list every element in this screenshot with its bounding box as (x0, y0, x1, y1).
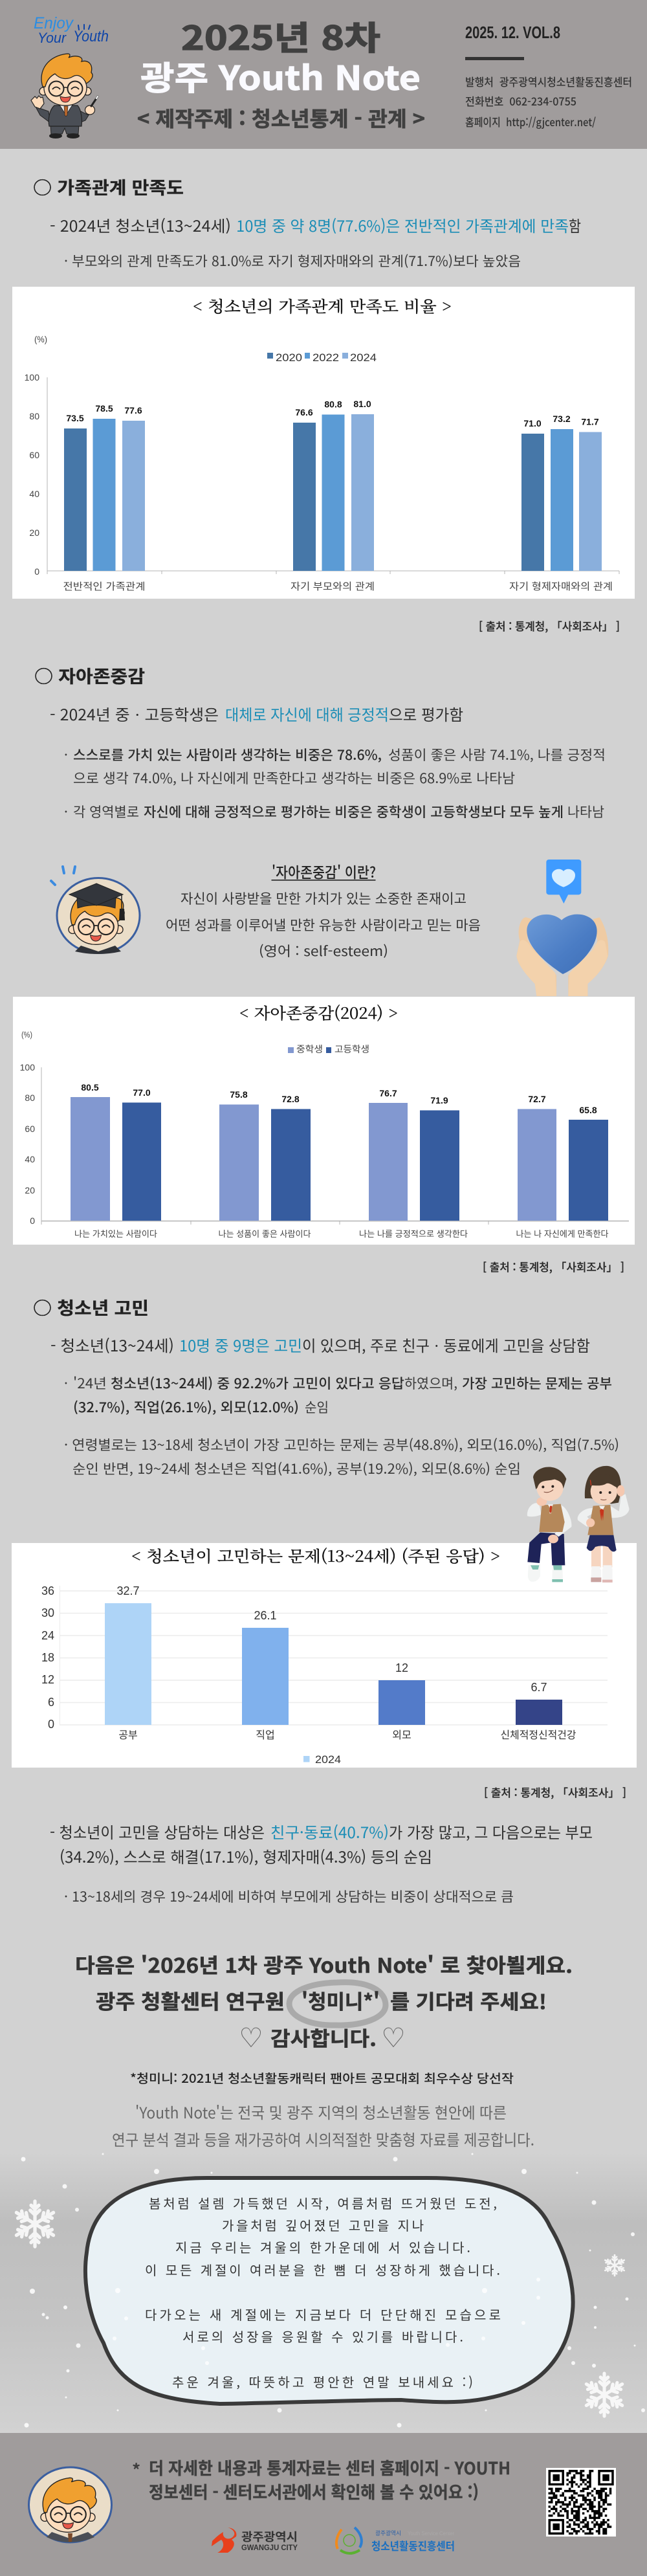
subtitle: 제작주제: < 제작주제 : 청소년통계 - 관계 > (137, 103, 425, 133)
publisher info: 발행처 광주광역시청소년활동진흥센터 (465, 73, 632, 89)
group: 긍정적으로 생각: 71.9 (430, 1095, 448, 1105)
grid and y axis: 24 (41, 1629, 54, 1642)
footnote: *청미니: 2021년 청소년활동캐릭터 팬아트 공모대회 최우수상 당선작 (130, 2069, 514, 2087)
unit: (%) (34, 334, 47, 344)
footer note: 정보센터 - 센터도서관에서 확인해 볼 수 있어요 :) (149, 2480, 479, 2504)
group: 전반적인 가족관계: 73.5 (66, 413, 84, 423)
about text: 'Youth Note'는 전국 및 광주 지역의 청소년활동 현안에 따른 (135, 2100, 507, 2123)
grid and y axis: 0 (48, 1718, 54, 1731)
group: 전반적인 가족관계: 77.6 (124, 405, 142, 416)
legend (267, 351, 377, 364)
axes: 100 (25, 372, 39, 383)
researcher line: '청미니*' (302, 1986, 380, 2015)
callout title: '자아존중감' 이란? (272, 860, 376, 882)
detail 1: '24년 (73, 1373, 107, 1393)
group: 가치있는 사람: 나는 가치있는 사람이다 (74, 1227, 157, 1239)
bar: 공부: 32.7 (116, 1584, 140, 1597)
bar: 신체적정신적건강 (501, 1681, 576, 1742)
key statement: 10명 중 9명은 고민 (179, 1333, 302, 1356)
girl student (578, 1466, 630, 1582)
statement: 고민 상담 대상 (50, 1820, 593, 1906)
legend (303, 1753, 341, 1766)
group: 자기 형제자매와의 관계: 자기 형제자매와의 관계 (509, 579, 613, 593)
about text: 연구 분석 결과 등을 재가공하여 시의적절한 맞춤형 자료를 제공합니다. (112, 2127, 534, 2150)
callout body: (영어 : self-esteem) (259, 941, 388, 960)
axes: 0 (34, 566, 39, 577)
detail 1 (64, 745, 606, 788)
legend (288, 1043, 369, 1056)
group: 자기 부모와의 관계: 자기 부모와의 관계 (291, 579, 375, 593)
grid and y axis: 36 (41, 1584, 54, 1597)
group: 자신에게 만족 (516, 1094, 609, 1239)
bubble text: 가을처럼 깊어졌던 고민을 지나 (222, 2215, 424, 2234)
logo: 청소년활동진흥센터 (336, 2527, 455, 2553)
issue number: 2025. 12. VOL.8 (465, 23, 560, 42)
thanks line: ♡ (381, 2022, 406, 2054)
group: 가치있는 사람: 77.0 (133, 1087, 151, 1098)
chart panel 3: 고민하는 문제 (12, 1543, 637, 1768)
closing message (75, 1949, 573, 2150)
group: 전반적인 가족관계: 전반적인 가족관계 (63, 579, 145, 593)
researcher line: 광주 청활센터 연구원 (96, 1986, 285, 2015)
QR code (546, 2468, 616, 2537)
axes: 0 (30, 1216, 35, 1226)
logo: 광주광역시 (212, 2527, 298, 2553)
logo text: Enjoy Your Youth (34, 14, 109, 46)
message bubble (85, 2178, 573, 2404)
logo: 광주광역시: 광주광역시 (241, 2528, 298, 2545)
callout body: 어떤 성과를 이루어낼 만한 유능한 사람이라고 믿는 마음 (166, 915, 481, 935)
logo text: Enjoy Your Youth: Enjoy (34, 14, 74, 32)
axes: 60 (25, 1124, 35, 1134)
group: 긍정적으로 생각: 76.7 (379, 1088, 397, 1098)
title: 2025년 8차: 2025년 8차 (181, 12, 380, 60)
bubble text: 서로의 성장을 응원할 수 있기를 바랍니다. (182, 2327, 463, 2346)
character: presenter in suit (31, 54, 98, 139)
group: 전반적인 가족관계 (63, 403, 145, 593)
group: 자신에게 만족: 나는 나 자신에게 만족한다 (516, 1227, 609, 1239)
thanks line: ♡ (239, 2022, 263, 2054)
key statement: - 청소년(13~24세) (50, 1333, 174, 1356)
illustration: two students sitting on chart (527, 1466, 630, 1582)
boy student (527, 1467, 572, 1582)
axes: 80 (29, 411, 39, 421)
legend: 2020 (276, 351, 302, 364)
thanks line (239, 2022, 406, 2054)
grid and y axis: 30 (41, 1606, 54, 1619)
axes: 20 (25, 1185, 35, 1195)
key statement (50, 1333, 590, 1356)
legend: 2024 (315, 1753, 341, 1766)
detail 2 (64, 1435, 619, 1478)
thanks line: 감사합니다. (270, 2023, 377, 2052)
key statement: 10명 중 약 8명(77.6%)은 전반적인 가족관계에 만족 (236, 214, 569, 236)
axes: 100 (20, 1062, 35, 1072)
title: 광주 Youth Note: 광주 Youth Note (140, 52, 421, 100)
chart panel 2: 자아존중감(2024) (13, 997, 635, 1245)
chart title: < 청소년이 고민하는 문제(13~24세) (주된 응답) > (131, 1544, 500, 1566)
group: 자신에게 만족: 72.7 (528, 1094, 546, 1104)
heading: ○ 자아존중감 (34, 663, 145, 688)
detail 1: 가장 고민하는 문제는 공부 (462, 1373, 612, 1393)
detail 1: · (64, 745, 68, 764)
divider bar (465, 57, 524, 60)
icon: character badge (28, 2467, 111, 2542)
legend: 중학생 (296, 1043, 323, 1056)
axes: 60 (29, 450, 39, 460)
detail 1: (32.7%), 직업(26.1%), 외모(12.0%) (73, 1397, 299, 1417)
legend: 고등학생 (334, 1043, 369, 1056)
group: 성품이 좋은 사람: 나는 성품이 좋은 사람이다 (219, 1227, 311, 1239)
statement: 고민 상담 대상: - 청소년이 고민을 상담하는 대상은 (50, 1820, 265, 1843)
about text (112, 2100, 534, 2150)
logo: 청소년활동진흥센터: Youth Service Center (408, 2531, 454, 2537)
key statement: 이 있으며, 주로 친구ㆍ동료에게 고민을 상담함 (302, 1333, 590, 1356)
group: 자기 부모와의 관계: 80.8 (324, 399, 342, 409)
footer note (132, 2456, 510, 2504)
publisher info: 홈페이지 http://gjcenter.net/ (465, 113, 596, 129)
grid and y axis: 12 (41, 1673, 54, 1686)
logo: 광주광역시: GWANGJU CITY (241, 2543, 298, 2552)
source 2: [ 출처 : 통계청, 「사회조사」 ] (483, 1258, 624, 1274)
logo: 청소년활동진흥센터: 청소년활동진흥센터 (371, 2537, 455, 2553)
key statement: - 2024년 청소년(13~24세) (50, 214, 231, 236)
detail 1: 하였으며, (404, 1373, 457, 1393)
bar: 공부: 공부 (118, 1726, 138, 1742)
detail 1: 순임 (305, 1397, 329, 1417)
detail 2: 각 영역별로 (73, 802, 139, 821)
key statement (50, 214, 581, 236)
callout body (166, 889, 481, 960)
publisher info: 전화번호 062-234-0755 (465, 93, 576, 109)
bar: 공부 (105, 1584, 151, 1742)
detail statement: · 부모와의 관계 만족도가 81.0%로 자기 형제자매와의 관계(71.7%)보다 높았음 (64, 251, 521, 271)
detail 1: · (64, 1373, 68, 1393)
key statement: - 2024년 중ㆍ고등학생은 (50, 702, 219, 725)
heading: ○ 가족관계 만족도 (33, 174, 184, 199)
detail 2: 자신에 대해 긍정적으로 평가하는 비중은 중학생이 고등학생보다 모두 높게 (144, 802, 564, 821)
publisher info (465, 73, 632, 129)
footer note: 더 자세한 내용과 통계자료는 센터 홈페이지 - YOUTH (149, 2456, 510, 2480)
detail 1: 청소년(13~24세) 중 92.2%가 고민이 있다고 응답 (111, 1373, 404, 1393)
group: 자신에게 만족: 65.8 (579, 1105, 597, 1115)
group: 전반적인 가족관계: 78.5 (95, 403, 113, 414)
next issue line: 다음은 '2026년 1차 광주 Youth Note' 로 찾아뵐게요. (75, 1949, 573, 1979)
group: 성품이 좋은 사람: 72.8 (281, 1094, 300, 1104)
group: 자기 형제자매와의 관계: 73.2 (553, 414, 571, 424)
axes: 40 (29, 489, 39, 499)
axes (20, 1062, 629, 1226)
section 3: 청소년 고민 (33, 1294, 619, 1478)
detail 1 (64, 1373, 612, 1417)
group: 성품이 좋은 사람 (219, 1089, 311, 1239)
group: 자기 형제자매와의 관계: 71.7 (581, 417, 599, 427)
bar: 외모: 외모 (392, 1726, 411, 1742)
group: 자기 부모와의 관계 (291, 399, 375, 593)
statement: 고민 상담 대상: (34.2%), 스스로 해결(17.1%), 형제자매(4.3%) 등의 순임 (60, 1845, 432, 1867)
chart title: < 자아존중감(2024) > (239, 1001, 398, 1023)
axes (25, 372, 619, 577)
axes: 80 (25, 1093, 35, 1103)
axes: 40 (25, 1154, 35, 1164)
group: 자기 부모와의 관계: 81.0 (353, 399, 371, 409)
key statement (50, 702, 463, 725)
source 1: [ 출처 : 통계청, 「사회조사」 ] (479, 617, 620, 634)
header band (0, 0, 647, 149)
callout: 자아존중감 definition (51, 860, 608, 996)
group: 긍정적으로 생각 (359, 1088, 468, 1239)
detail: · 13~18세의 경우 19~24세에 비하여 부모에게 상담하는 비중이 상대적으로 큼 (64, 1887, 514, 1906)
footer note: * (132, 2458, 140, 2482)
key statement: 함 (569, 214, 581, 236)
section 1: 가족관계 만족도 (33, 174, 581, 271)
snow background (0, 2152, 647, 2434)
group: 성품이 좋은 사람: 75.8 (230, 1089, 248, 1100)
logo text: Enjoy Your Youth: Youth (73, 28, 109, 45)
bar: 신체적정신적건강: 신체적정신적건강 (501, 1726, 576, 1742)
logo text: Enjoy Your Youth: Your (38, 30, 67, 46)
chart panel 1: 가족관계 만족도 비율 (12, 287, 635, 599)
group: 가치있는 사람: 80.5 (81, 1082, 99, 1093)
section 2: 자아존중감 (34, 663, 606, 821)
key statement: 으로 평가함 (389, 702, 463, 725)
bar: 직업: 26.1 (254, 1609, 277, 1622)
highlight circle (289, 1982, 386, 2025)
bubble text: 이 모든 계절이 여러분을 한 뼘 더 성장하게 했습니다. (145, 2260, 500, 2279)
statement: 고민 상담 대상: 가 가장 많고, 그 다음으로는 부모 (389, 1820, 593, 1843)
bubble text: 봄처럼 설렘 가득했던 시작, 여름처럼 뜨거웠던 도전, (149, 2193, 497, 2212)
legend: 2024 (350, 351, 377, 364)
group: 긍정적으로 생각: 나는 나를 긍정적으로 생각한다 (359, 1227, 468, 1239)
source 3: [ 출처 : 통계청, 「사회조사」 ] (484, 1784, 626, 1800)
grid and y axis (41, 1584, 608, 1731)
grid and y axis: 6 (48, 1696, 54, 1709)
axes: 20 (29, 527, 39, 538)
bubble text (145, 2193, 501, 2391)
group: 자기 형제자매와의 관계: 71.0 (523, 418, 542, 428)
researcher line (96, 1986, 547, 2015)
detail 2: 나타남 (567, 802, 604, 821)
key statement: 대체로 자신에 대해 긍정적 (225, 702, 389, 725)
icon: graduate character (51, 867, 140, 954)
bar: 직업 (242, 1609, 289, 1742)
bar: 외모: 12 (395, 1661, 408, 1674)
group: 가치있는 사람 (71, 1082, 161, 1239)
detail 1: 성품이 좋은 사람 74.1%, 나를 긍정적 (388, 745, 606, 764)
detail 1: 스스로를 가치 있는 사람이라 생각하는 비중은 78.6%, (73, 745, 382, 764)
footer band (0, 2433, 647, 2576)
chart title: < 청소년의 가족관계 만족도 비율 > (193, 294, 452, 316)
heading: ○ 청소년 고민 (33, 1294, 149, 1320)
group: 자기 부모와의 관계: 76.6 (295, 407, 313, 417)
detail 2: 순인 반면, 19~24세 청소년은 직업(41.6%), 공부(19.2%), 외모(8.6%) 순임 (72, 1459, 521, 1478)
bubble text: 지금 우리는 겨울의 한가운데에 서 있습니다. (175, 2237, 470, 2256)
grid and y axis: 18 (41, 1651, 54, 1664)
detail 2: · 연령별로는 13~18세 청소년이 가장 고민하는 문제는 공부(48.8%), 외모(16.0%), 직업(7.5%) (64, 1435, 619, 1454)
bar: 외모 (378, 1661, 425, 1742)
callout body: 자신이 사랑받을 만한 가치가 있는 소중한 존재이고 (181, 889, 466, 908)
logo: 청소년활동진흥센터: 광주광역시 (375, 2529, 401, 2537)
statement: 고민 상담 대상: 친구·동료(40.7%) (270, 1820, 389, 1843)
bar: 신체적정신적건강: 6.7 (531, 1681, 547, 1694)
bubble text: 다가오는 새 계절에는 지금보다 더 단단해진 모습으로 (145, 2305, 501, 2324)
group: 자기 형제자매와의 관계 (509, 414, 613, 593)
bar: 직업: 직업 (256, 1726, 275, 1742)
detail 1: 으로 생각 74.0%, 나 자신에게 만족한다고 생각하는 비중은 68.9%로 나타남 (73, 768, 515, 788)
legend: 2022 (313, 351, 339, 364)
unit: (%) (21, 1030, 32, 1039)
bubble text: 추운 겨울, 따뜻하고 평안한 연말 보내세요 :) (172, 2372, 473, 2391)
icon: heart speech bubble and hands (516, 860, 608, 996)
detail 2: · (64, 802, 68, 821)
researcher line: 를 기다려 주세요! (390, 1986, 547, 2015)
